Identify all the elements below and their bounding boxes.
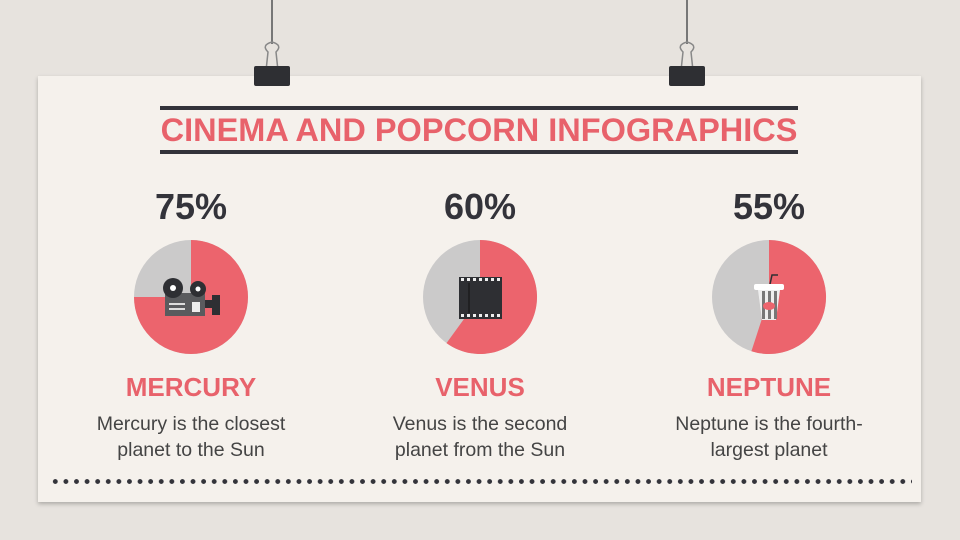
dotted line: [50, 479, 912, 484]
text: NEPTUNE: [707, 372, 831, 402]
text: 55%: [733, 186, 805, 227]
text: 75%: [155, 186, 227, 227]
text: VENUS: [435, 372, 525, 402]
percentages: [155, 186, 805, 227]
icon: drink cup: [754, 275, 784, 320]
pie: venus: [423, 240, 537, 354]
text: Neptune is the fourth-: [675, 413, 863, 435]
icon: film strip: [459, 277, 502, 319]
icon: projector: [163, 278, 220, 316]
card: [38, 76, 921, 502]
descriptions: [97, 413, 863, 461]
text: 60%: [444, 186, 516, 227]
pie: neptune: [712, 240, 826, 354]
text: Venus is the second: [393, 413, 567, 435]
clip right: [669, 0, 705, 86]
text: MERCURY: [126, 372, 256, 402]
text: Mercury is the closest: [97, 413, 285, 435]
text: planet from the Sun: [395, 439, 565, 461]
text: planet to the Sun: [117, 439, 265, 461]
title: CINEMA AND POPCORN INFOGRAPHICS: [161, 112, 797, 148]
text: largest planet: [710, 439, 828, 461]
clip left: [254, 0, 290, 86]
pie: mercury: [134, 240, 248, 354]
names: [126, 372, 831, 402]
